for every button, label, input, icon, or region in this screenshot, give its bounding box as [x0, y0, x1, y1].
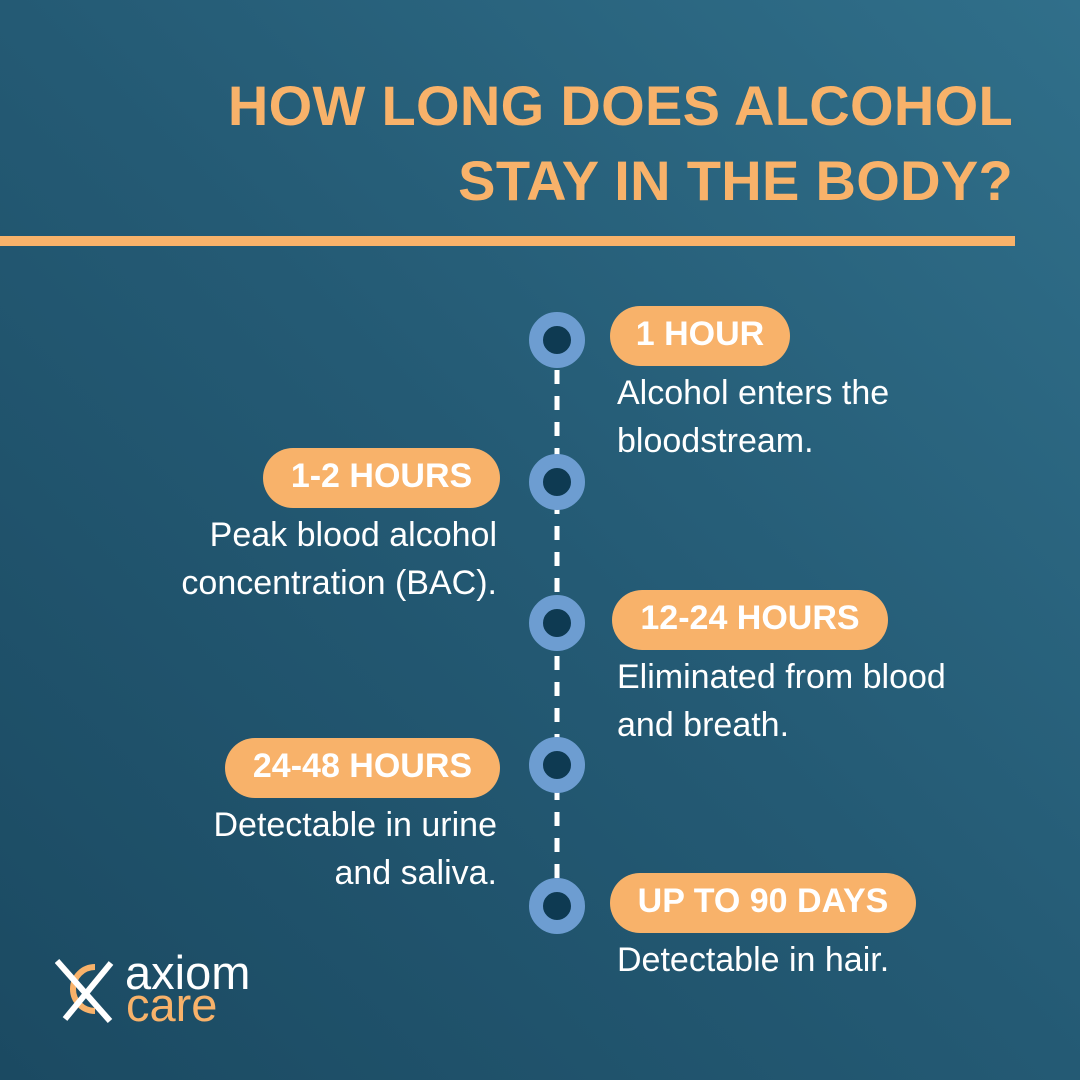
logo: axiom: [125, 946, 250, 999]
step: 1 hour: Alcohol enters the: [617, 374, 889, 412]
step: 1 hour: [610, 306, 889, 460]
step: up to 90 days: [610, 873, 916, 979]
step: 1-2 hours: [181, 448, 500, 602]
step: 1-2 hours: Peak blood alcohol: [210, 516, 497, 554]
title: STAY IN THE BODY?: [458, 149, 1013, 212]
step: 12-24 hours: [612, 590, 946, 744]
step: 12-24 hours: 12-24 HOURS: [640, 599, 860, 637]
step: 1 hour: bloodstream.: [617, 422, 814, 460]
step: 24-48 hours: 24-48 HOURS: [253, 747, 472, 785]
step: 24-48 hours: Detectable in urine: [213, 806, 497, 844]
title: [228, 74, 1013, 212]
step: 1 hour: 1 HOUR: [636, 315, 764, 353]
step: up to 90 days: UP TO 90 DAYS: [638, 882, 888, 920]
logo: care: [126, 978, 217, 1031]
logo: [55, 946, 250, 1031]
step: up to 90 days: Detectable in hair.: [617, 941, 889, 979]
step: 24-48 hours: [213, 738, 500, 892]
step: 24-48 hours: and saliva.: [334, 854, 497, 892]
step: 12-24 hours: and breath.: [617, 706, 789, 744]
step: 1-2 hours: concentration (BAC).: [181, 564, 497, 602]
step: 12-24 hours: Eliminated from blood: [617, 658, 946, 696]
step: 1-2 hours: 1-2 HOURS: [291, 457, 472, 495]
title: HOW LONG DOES ALCOHOL: [228, 74, 1013, 137]
